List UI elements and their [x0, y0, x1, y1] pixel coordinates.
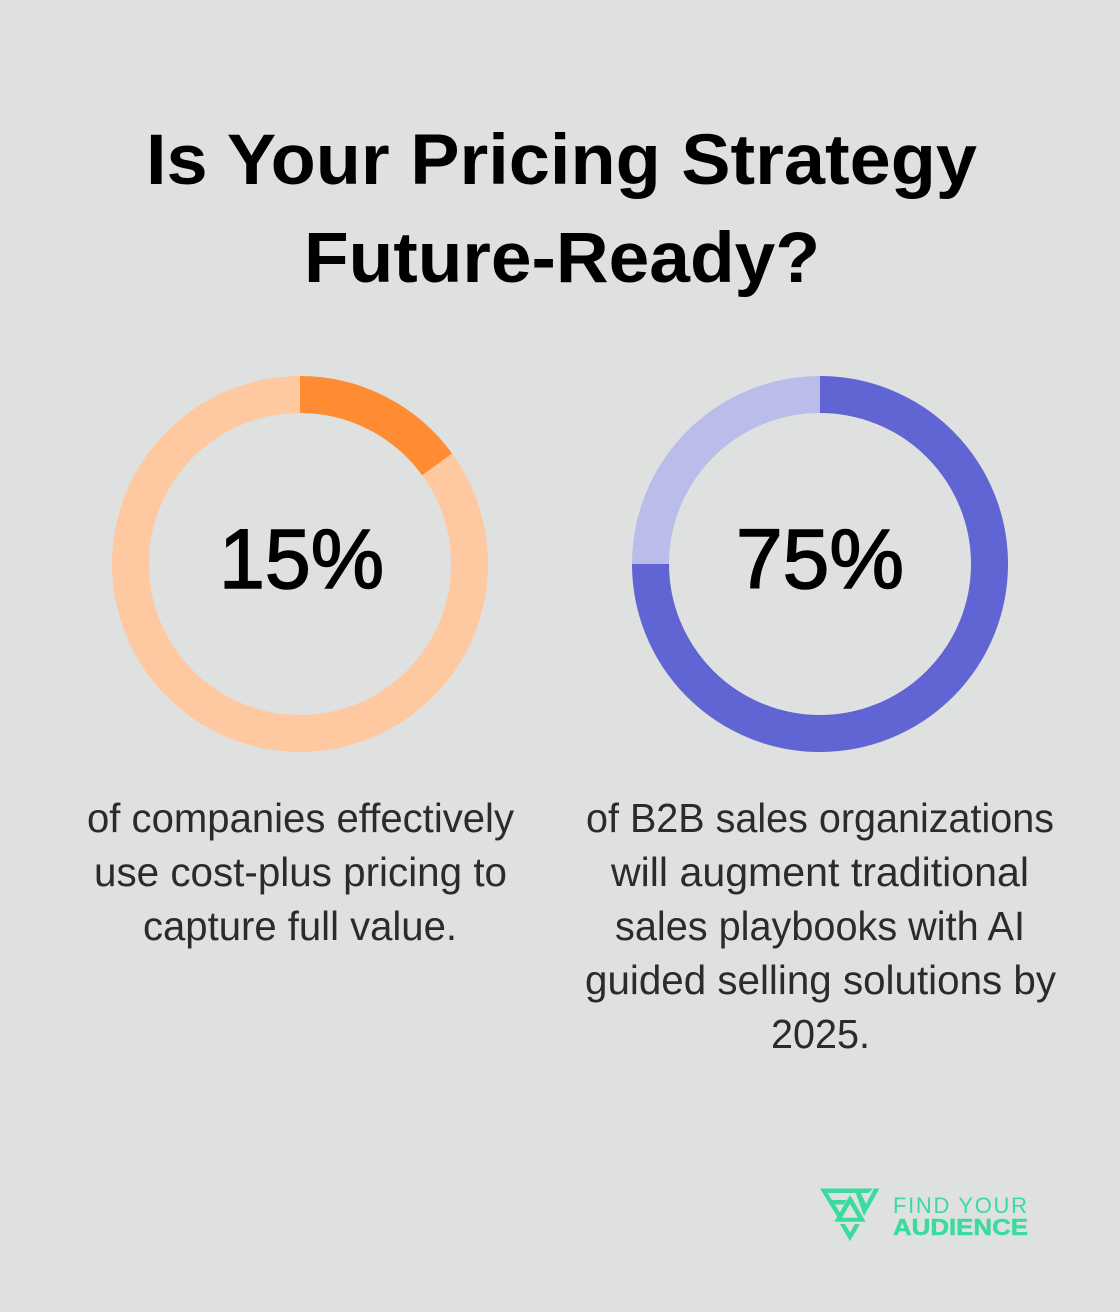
text block: AI guided selling stat: will augment traditional — [610, 849, 1029, 895]
icon: logo mark — [820, 1188, 880, 1241]
logo wordmark: FIND YOUR — [893, 1193, 1027, 1218]
text block: AI guided selling stat: guided selling solutions by — [585, 957, 1056, 1003]
donut chart: 15%: 15% — [219, 512, 384, 606]
logo wordmark: AUDIENCE — [893, 1214, 1028, 1240]
logo wordmark — [893, 1193, 1028, 1240]
text block: cost-plus pricing stat: use cost-plus pricing to — [94, 849, 507, 895]
text block: cost-plus pricing stat: capture full value. — [143, 903, 457, 949]
donut chart: 15% — [130, 394, 470, 734]
text block: cost-plus pricing stat: of companies effectively — [87, 795, 514, 841]
text block: AI guided selling stat: 2025. — [771, 1011, 870, 1057]
title — [146, 121, 978, 298]
title: Is Your Pricing Strategy — [146, 121, 978, 200]
donut chart: 75%: 75% — [736, 512, 904, 606]
text block: AI guided selling stat: sales playbooks with AI — [615, 903, 1025, 949]
logo: Find Your Audience — [820, 1188, 1028, 1241]
text block: cost-plus pricing stat — [87, 795, 514, 949]
text block: AI guided selling stat: of B2B sales organizations — [586, 795, 1054, 841]
text block: AI guided selling stat — [585, 795, 1056, 1057]
donut chart: 75% — [650, 394, 990, 734]
title: Future-Ready? — [304, 219, 820, 298]
